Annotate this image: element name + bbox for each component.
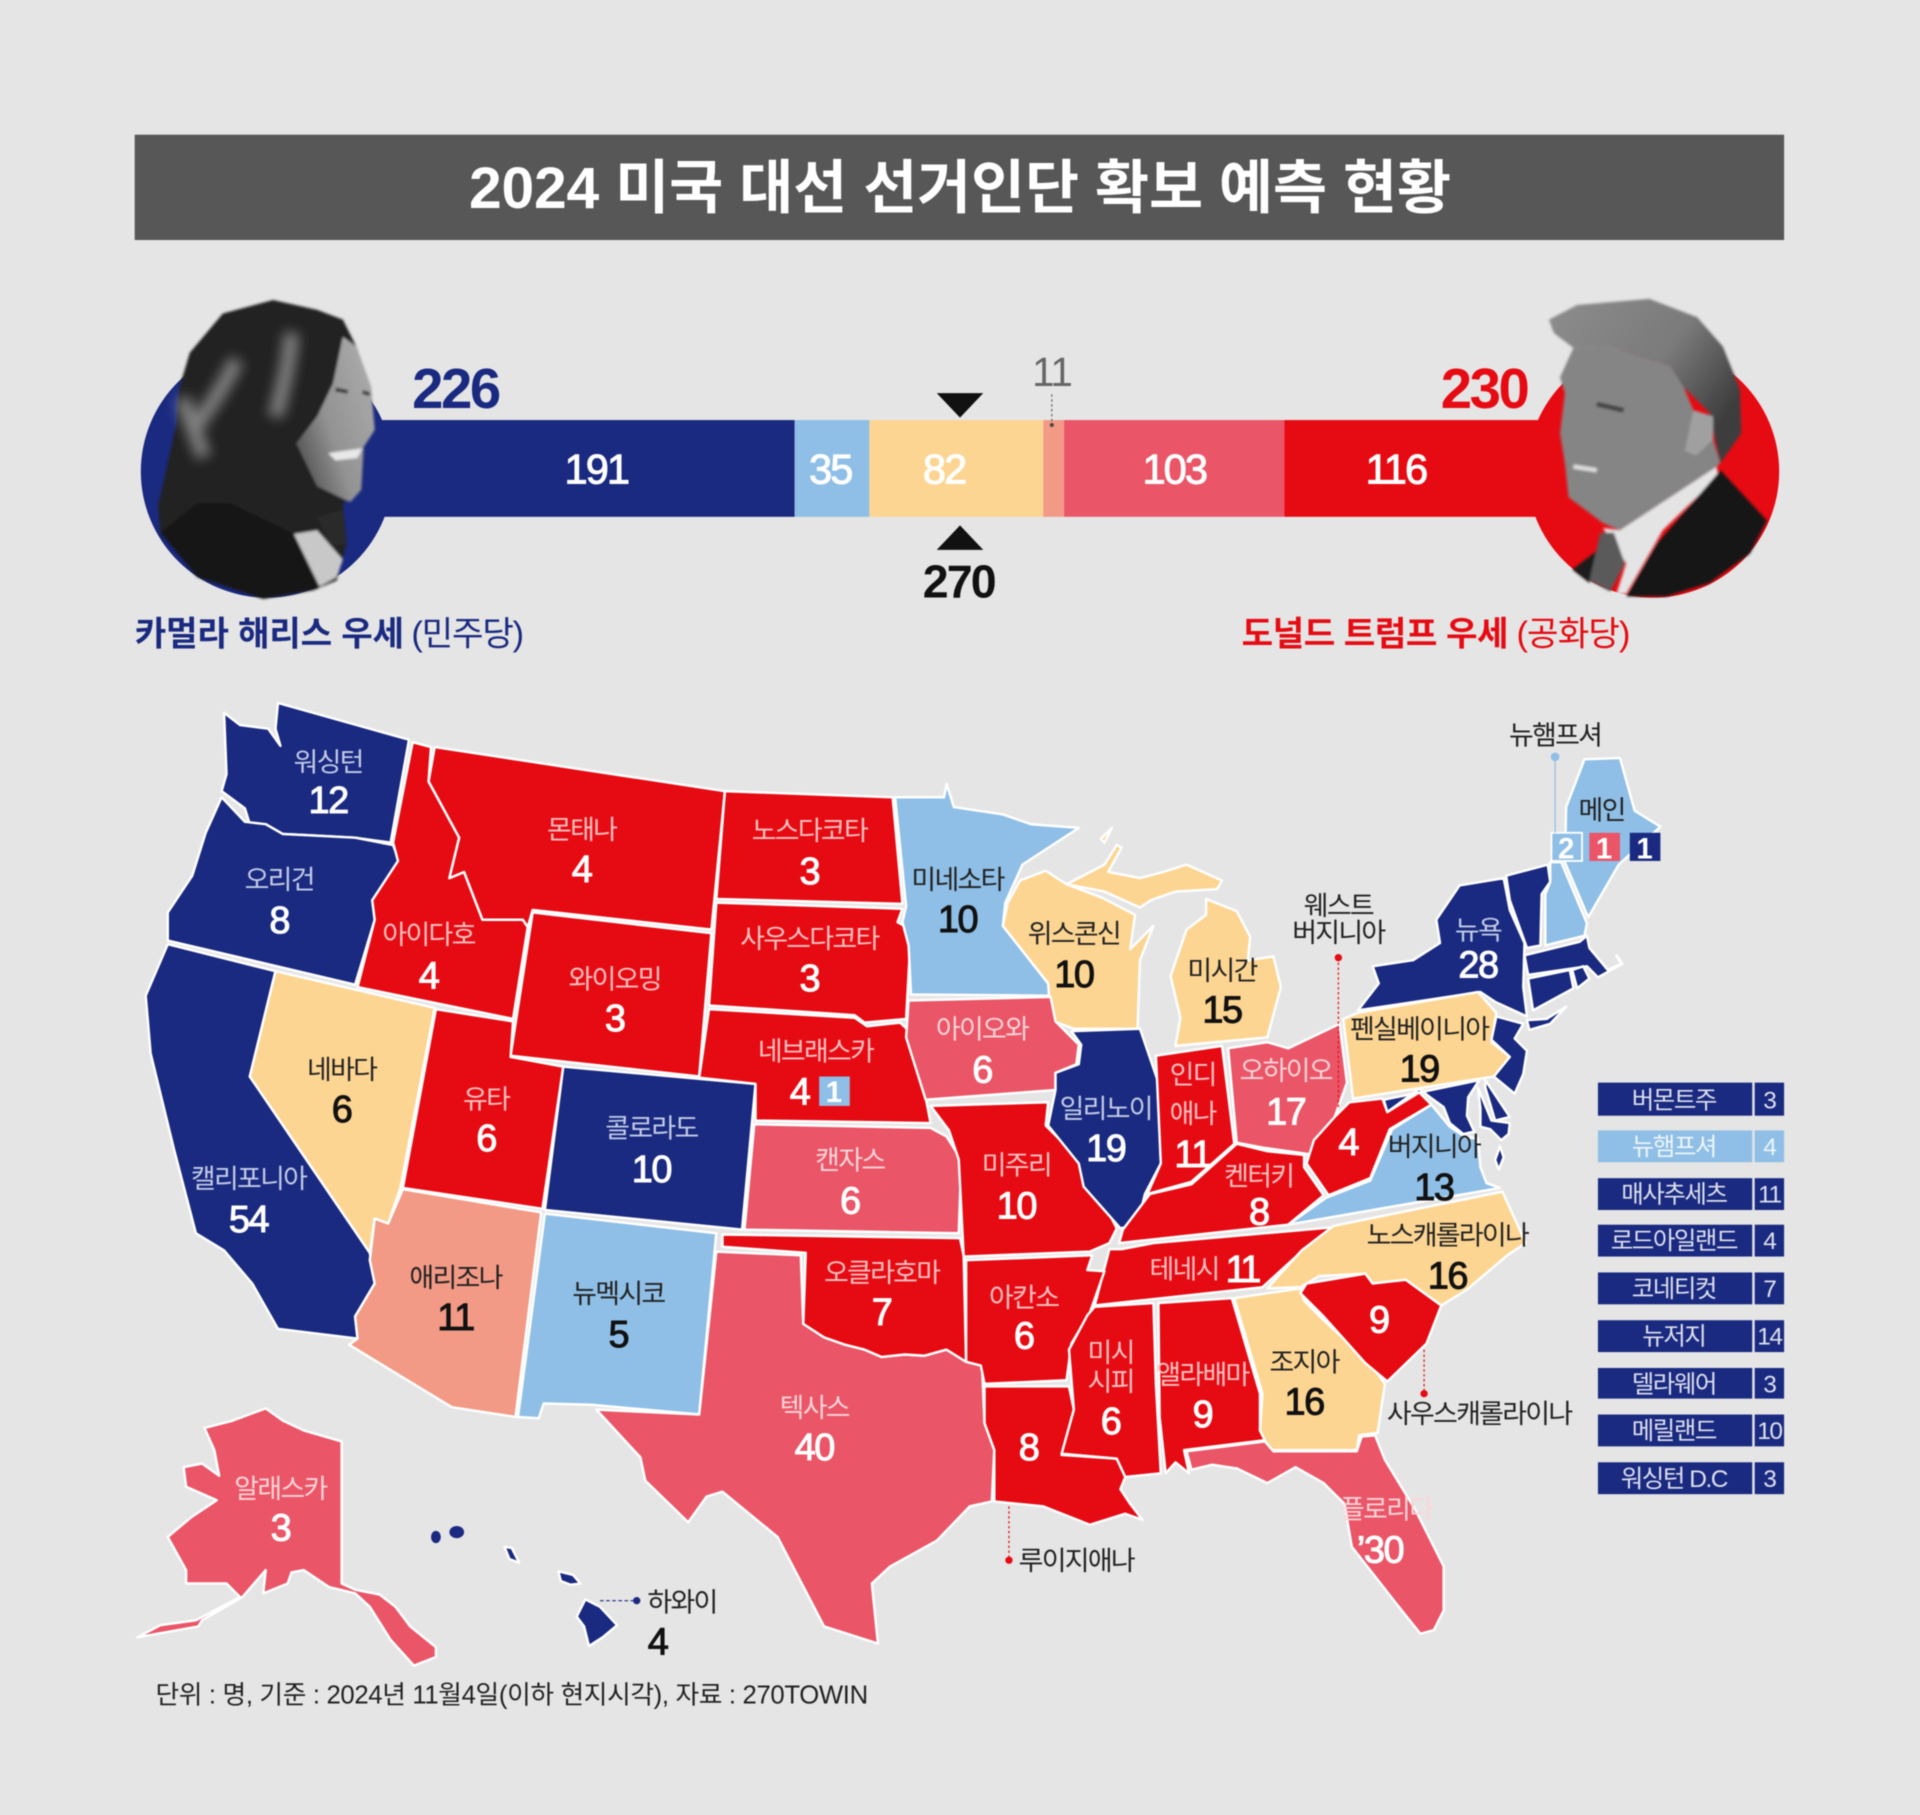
label: 몬태나: 4 [572,849,592,891]
callout: 뉴햄프셔: 뉴햄프셔 [1509,721,1601,751]
South Dakota [709,903,911,1023]
row: 로드아일랜드 [1598,1225,1784,1257]
label: 미시시피 [1088,1338,1134,1443]
electoral vote bar: 35 [809,446,852,493]
label: 네바다: 6 [332,1089,352,1131]
New Mexico [518,1214,716,1418]
Minnesota [895,784,1079,996]
title banner [135,135,1784,240]
label: 조지아: 조지아 [1269,1348,1341,1378]
label: 인디애나 [1170,1060,1217,1176]
row: 뉴햄프셔 [1598,1130,1784,1162]
row: 코네티컷 [1598,1272,1784,1304]
South Carolina [1300,1274,1441,1381]
Wisconsin [1003,871,1153,1029]
label: 아칸소: 아칸소 [989,1283,1059,1313]
Idaho [358,742,528,1019]
label: 인디애나: 11 [1174,1134,1211,1176]
row: 매사추세츠: 11 [1758,1182,1781,1209]
Michigan lower peninsula [1171,899,1281,1046]
callout: 루이지애나: 루이지애나 [1019,1546,1135,1576]
label: 몬태나 [547,815,617,891]
row: 뉴저지 [1598,1320,1784,1352]
label: 버지니아: 버지니아 [1388,1132,1482,1162]
label: 미시시피: 시피 [1088,1367,1134,1397]
label: 오리건: 8 [269,900,289,942]
label: 아칸소: 6 [1014,1315,1034,1357]
Kentucky [1119,1144,1324,1243]
Michigan upper peninsula [1067,845,1222,908]
row: 버몬트주: 버몬트주 [1632,1086,1717,1114]
row: 뉴햄프셔: 뉴햄프셔 [1632,1133,1716,1161]
label: 미네소타: 10 [938,899,978,941]
label: 와이오밍: 와이오밍 [569,964,661,994]
label: 유타: 6 [476,1118,496,1160]
label: 아이다호: 아이다호 [382,920,476,950]
label: 위스콘신: 10 [1054,954,1094,996]
label: 켄터키: 8 [1249,1192,1269,1234]
label: 위스콘신: 위스콘신 [1028,919,1120,949]
portrait: Kamala Harris [158,300,375,599]
label: 아이오와: 아이오와 [936,1015,1029,1045]
Missouri [931,1102,1117,1257]
marker: 270 to win [923,393,995,608]
label: West Virginia votes: 4 [1338,1122,1358,1164]
legend: small northeastern states [1598,1083,1784,1494]
Montana [429,747,725,930]
row: 버몬트주 [1598,1083,1784,1116]
label: 캘리포니아: 54 [229,1199,269,1241]
label: 메인 with split vote tiles: 2 [1558,833,1574,866]
label: 미주리: 미주리 [982,1150,1051,1180]
label: 네브래스카 with split vote tile: 1 [826,1076,842,1109]
callout: 웨스트 버지니아 [1292,891,1386,1108]
label: 와이오밍: 3 [605,998,625,1040]
label: 워싱턴 [294,748,363,822]
title banner: 2024 미국 대선 선거인단 확보 예측 현황 [469,156,1451,221]
row: 코네티컷: 7 [1763,1276,1776,1303]
tally: Harris 226: 226 [412,357,500,420]
Alaska [137,1408,436,1666]
Maryland [1384,1080,1479,1134]
label: 노스다코타: 3 [800,851,820,893]
label: 메인 with split vote tiles: 1 [1596,833,1612,866]
label: 오클라호마: 7 [872,1292,892,1334]
callout: 루이지애나 [1005,1506,1135,1576]
label: 사우스다코타: 3 [800,958,820,1000]
label: 펜실베이니아: 19 [1400,1048,1439,1090]
label: 캘리포니아: 캘리포니아 [191,1164,308,1194]
New Hampshire [1545,862,1587,945]
callout: 웨스트 버지니아: 웨스트 [1304,891,1374,921]
row: 로드아일랜드: 4 [1763,1228,1776,1255]
label: 미시간: 15 [1202,990,1242,1032]
Georgia [1234,1288,1385,1450]
label: 아이오와: 6 [972,1050,992,1092]
label: 유타 [463,1084,511,1160]
Texas [596,1252,994,1644]
label: 미주리: 10 [997,1186,1036,1228]
label: 워싱턴: 12 [309,780,348,822]
label: 미시간 [1187,956,1258,1032]
Connecticut [1528,970,1573,1010]
label: 테네시: 테네시 [1149,1255,1219,1285]
electoral vote bar: 103 [1142,446,1207,493]
label: 인디애나: 인디 [1170,1060,1216,1090]
label: 뉴멕시코 [572,1279,665,1356]
callout: 뉴햄프셔 [1509,721,1601,833]
label: 노스캐롤라이나: 16 [1428,1255,1467,1297]
Isle Royale [1101,828,1112,843]
label: 아이오와 [936,1015,1029,1092]
Mississippi [1062,1303,1161,1477]
label: 위스콘신 [1028,919,1120,996]
label: 캔자스 [815,1146,885,1223]
Tennessee [1095,1227,1335,1306]
label: 콜로라도 [605,1114,698,1191]
label: 텍사스: 40 [795,1427,834,1469]
Oregon [168,797,399,985]
label: 켄터키: 켄터키 [1224,1162,1293,1192]
label: 알래스카: 알래스카 [234,1474,327,1504]
source note: 단위 : 명, 기준 : 2024년 11월4일(이하 현지시각), 자료 : 270TOWIN [156,1681,868,1710]
label: 앨라배마: 9 [1193,1394,1213,1436]
callout: 사우스캐롤라이나 [1387,1350,1572,1429]
row: 버몬트주: 3 [1763,1087,1776,1114]
Louisiana [984,1386,1142,1525]
label: 뉴욕 [1455,915,1502,986]
marker: 270 to win: 270 [923,556,995,608]
label: 조지아 [1269,1348,1341,1424]
row: 메릴랜드: 메릴랜드 [1632,1417,1717,1445]
caption: Harris: 카멀라 해리스 우세 [135,615,404,653]
label: 캔자스: 캔자스 [815,1146,885,1176]
label: 오리건 [245,865,314,942]
Iowa [906,997,1079,1100]
tally: Trump 230: 230 [1441,357,1529,420]
label: 뉴욕: 28 [1458,944,1498,986]
label: 노스캐롤라이나 [1367,1220,1529,1297]
label: 아이다호: 4 [419,955,439,997]
callout: 11 toss-up leaning: 11 [1032,349,1072,395]
electoral vote bar [141,345,1779,598]
row: 워싱턴 D.C: 워싱턴 D.C [1621,1465,1728,1493]
label: 루이지애나 votes: 8 [1019,1427,1039,1469]
Kansas [744,1124,961,1233]
label: 미네소타: 미네소타 [911,865,1006,895]
Rhode Island [1572,966,1589,988]
label: 사우스다코타: 사우스다코타 [740,924,881,954]
West Virginia [1307,1092,1431,1195]
row: 델라웨어: 3 [1763,1371,1776,1398]
row: 코네티컷: 코네티컷 [1632,1275,1716,1303]
label: 사우스다코타 [740,924,881,1000]
caption: Trump [1242,615,1630,653]
row: 델라웨어 [1598,1368,1784,1399]
label: 일리노이: 일리노이 [1060,1094,1152,1124]
callout: 하와이: 하와이 [647,1588,717,1618]
portrait: Donald Trump [1549,299,1767,596]
row: 델라웨어: 델라웨어 [1632,1370,1716,1398]
row: 워싱턴 D.C: 3 [1763,1466,1776,1493]
caption: Trump: 도널드 트럼프 우세 [1242,615,1509,653]
label: 미주리 [982,1150,1051,1228]
label: 메인 with split vote tiles [1551,795,1660,866]
row: 뉴저지: 뉴저지 [1642,1323,1705,1351]
caption: Harris: (민주당) [411,615,524,653]
Florida [1187,1435,1444,1634]
callout: 11 toss-up leaning [1032,349,1072,427]
caption: Trump: (공화당) [1517,615,1630,653]
row: 매사추세츠: 매사추세츠 [1621,1181,1727,1209]
row: 메릴랜드 [1598,1415,1784,1446]
row: 뉴햄프셔: 4 [1763,1134,1776,1161]
row: 뉴저지: 14 [1757,1324,1782,1351]
Utah [403,1009,563,1209]
Arizona [349,1189,541,1417]
label: 콜로라도: 10 [632,1149,671,1191]
label: 미시시피: 6 [1101,1401,1121,1443]
row: 메릴랜드: 10 [1757,1418,1782,1445]
label: 유타: 유타 [463,1084,511,1114]
California [146,944,375,1339]
label: 테네시 [1149,1249,1260,1291]
Nebraska [699,1009,931,1123]
label: 애리조나: 애리조나 [409,1263,503,1293]
label: 메인 with split vote tiles: 메인 [1579,795,1625,825]
callout: 하와이 [600,1588,717,1664]
Wyoming [511,912,711,1077]
label: 아칸소 [989,1283,1059,1357]
Oklahoma [722,1234,966,1362]
label: 오하이오 [1240,1056,1333,1133]
row: 워싱턴 D.C [1598,1462,1784,1494]
label: 오클라호마: 오클라호마 [824,1258,941,1288]
label: 테네시: 11 [1226,1249,1260,1291]
label: 콜로라도: 콜로라도 [605,1114,698,1144]
label: 일리노이: 19 [1086,1128,1126,1170]
Ohio [1228,1024,1347,1155]
label: 노스캐롤라이나: 노스캐롤라이나 [1367,1220,1529,1250]
New York [1358,878,1527,1016]
Illinois [1048,1029,1161,1228]
label: 조지아: 16 [1284,1382,1324,1424]
callout: 사우스캐롤라이나: 사우스캐롤라이나 [1387,1399,1572,1429]
callout: 하와이: 4 [648,1622,668,1664]
callout: 웨스트 버지니아: 버지니아 [1292,918,1386,948]
electoral vote bar: 116 [1366,446,1427,493]
label: 텍사스 [780,1393,850,1469]
label: 오클라호마 [824,1258,941,1334]
New Jersey [1491,1016,1527,1094]
label: 몬태나: 몬태나 [547,815,617,845]
label: 네브래스카 with split vote tile [758,1037,874,1114]
label: South Carolina votes: 9 [1369,1299,1389,1341]
caption: Harris [135,615,524,653]
electoral vote bar: 82 [923,446,966,493]
Virginia [1288,1105,1500,1225]
label: 미시시피: 미시 [1088,1338,1134,1368]
Nevada [250,971,435,1253]
map: state labels [191,721,1660,1664]
row: 매사추세츠 [1598,1178,1784,1210]
label: 노스다코타: 노스다코타 [752,816,869,846]
map: state shapes [137,703,1660,1666]
label: 캔자스: 6 [840,1181,860,1223]
label: 미시간: 미시간 [1187,956,1258,986]
label: 펜실베이니아 [1350,1015,1490,1090]
label: 알래스카 [234,1474,327,1550]
Washington [222,703,409,843]
label: 와이오밍 [569,964,661,1040]
label: 미네소타 [911,865,1006,941]
label: 앨라배마 [1156,1360,1251,1436]
label: 네브래스카 with split vote tile: 4 [790,1072,810,1114]
label: 플로리다: 플로리다 [1340,1495,1434,1525]
Alabama [1158,1298,1265,1473]
label: 오하이오: 17 [1266,1091,1306,1133]
label: 메인 with split vote tiles: 1 [1636,833,1653,866]
label: 애리조나 [409,1263,503,1339]
electoral vote bar: 191 [565,446,629,493]
Indiana [1147,1046,1234,1194]
label: 플로리다 [1340,1495,1434,1572]
label: 캘리포니아 [191,1164,308,1241]
label: 버지니아 [1388,1132,1482,1209]
label: 버지니아: 13 [1414,1167,1454,1209]
label: 아이다호 [382,920,476,997]
label: 네바다: 네바다 [307,1055,378,1085]
Virginia eastern shore [1495,1146,1504,1170]
label: 뉴욕: 뉴욕 [1455,915,1502,945]
Hawaii islands [431,1526,617,1646]
label: 노스다코타 [752,816,869,893]
label: 네브래스카 with split vote tile: 네브래스카 [758,1037,874,1067]
label: 네바다 [307,1055,378,1131]
Maine [1565,758,1660,917]
Colorado [545,1067,756,1230]
label: 워싱턴: 워싱턴 [294,748,363,778]
Long Island [1527,1007,1566,1030]
Vermont [1506,865,1550,948]
Maryland eastern shore [1478,1088,1510,1140]
label: 뉴멕시코: 5 [609,1314,629,1356]
label: 펜실베이니아: 펜실베이니아 [1350,1015,1490,1045]
label: 오리건: 오리건 [245,865,314,895]
label: 켄터키 [1224,1162,1293,1234]
Massachusetts [1524,936,1622,977]
Arkansas [966,1255,1104,1384]
North Carolina [1267,1192,1526,1306]
Pennsylvania [1343,992,1510,1099]
label: 일리노이 [1060,1094,1152,1170]
North Dakota [716,791,902,904]
label: 알래스카: 3 [271,1508,291,1550]
label: 뉴멕시코: 뉴멕시코 [572,1279,665,1309]
row: 로드아일랜드: 로드아일랜드 [1611,1227,1738,1255]
label: 인디애나: 애나 [1170,1099,1217,1129]
label: 텍사스: 텍사스 [780,1393,850,1423]
label: 앨라배마: 앨라배마 [1156,1360,1251,1390]
label: 플로리다: ’30 [1357,1530,1403,1572]
label: 오하이오: 오하이오 [1240,1056,1333,1086]
label: 애리조나: 11 [437,1297,474,1339]
Delaware [1485,1080,1510,1121]
